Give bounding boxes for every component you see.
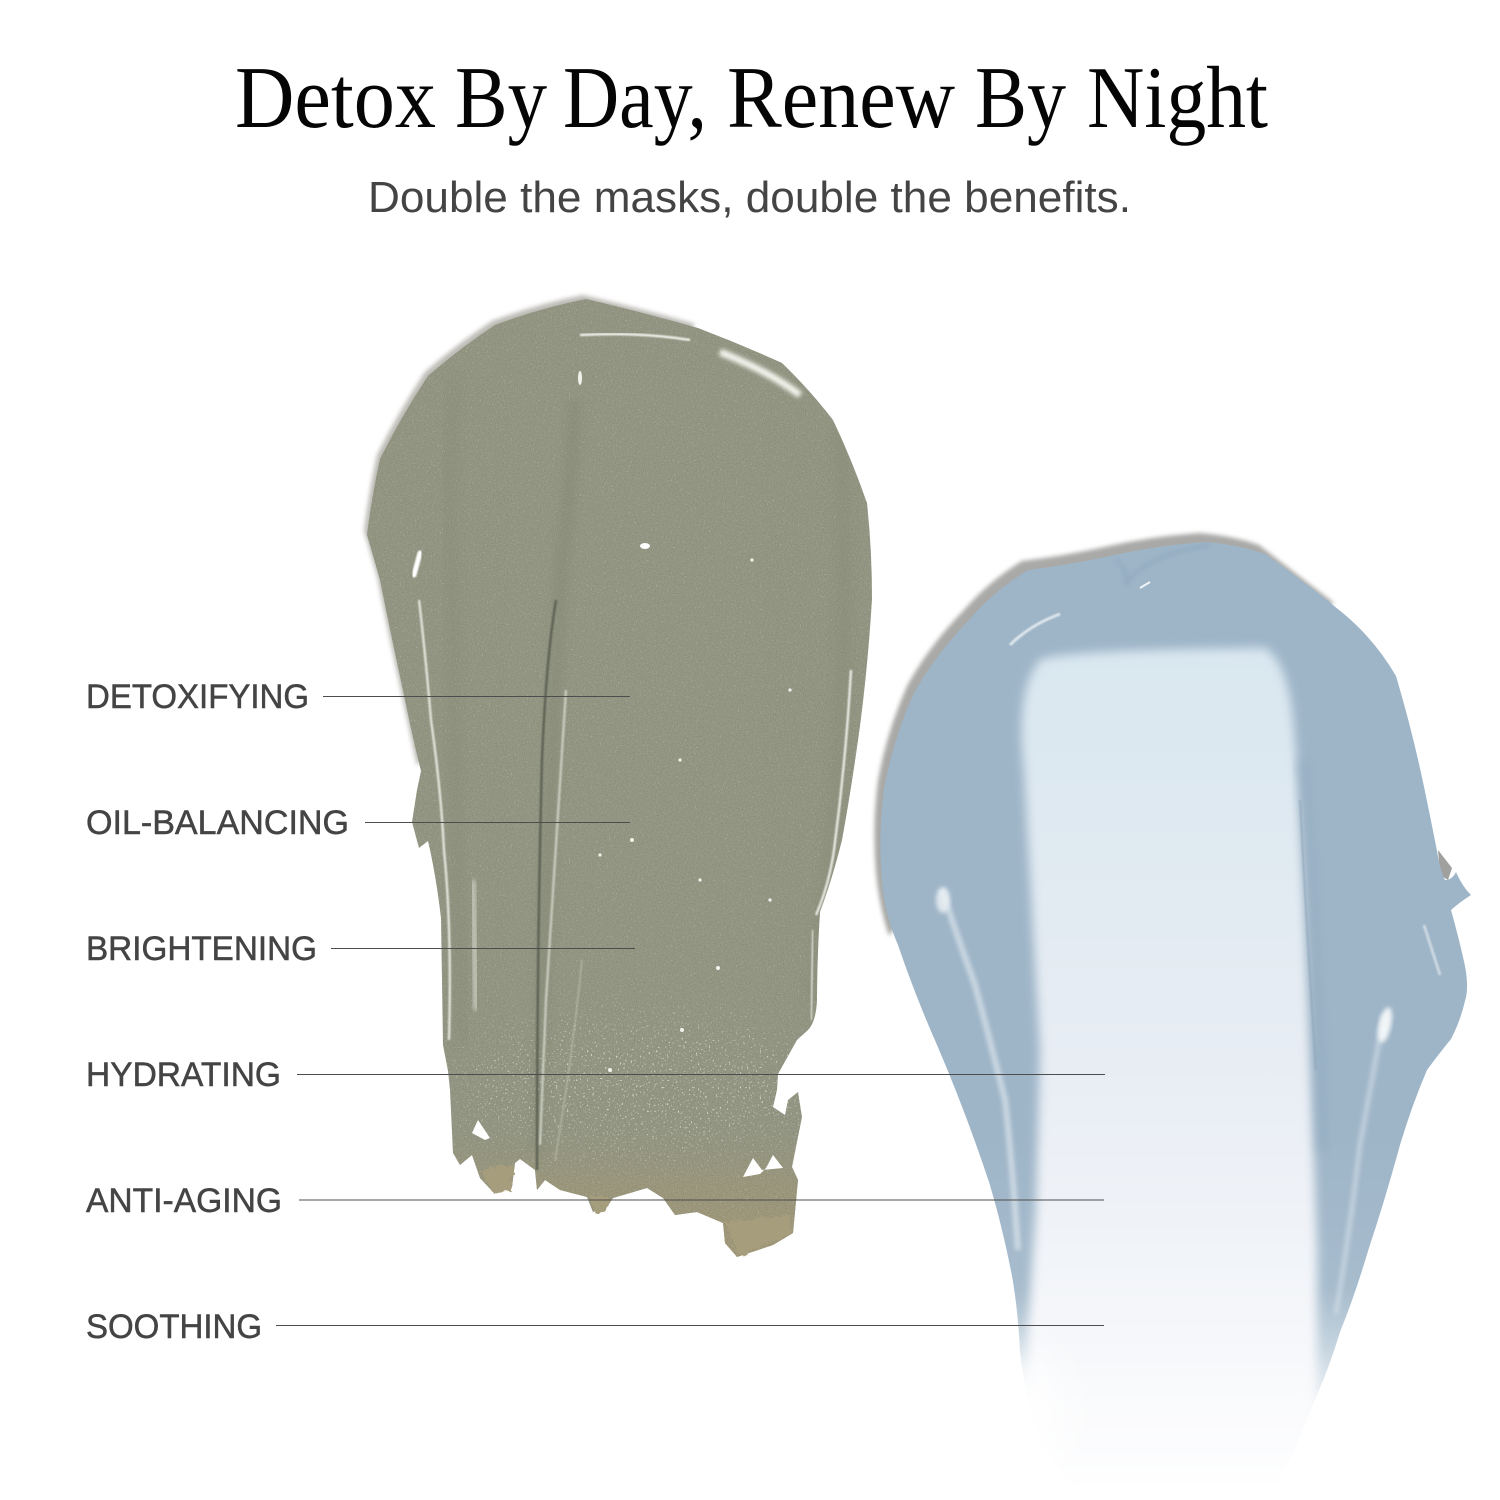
right gloss [1336,1014,1384,1314]
swatch shadow [874,533,1334,936]
title [235,50,1268,147]
title: Day, [563,50,707,147]
bottom left fade [1019,1332,1034,1406]
torn bottom crumbs [480,1165,790,1256]
swatch body [880,542,1471,1500]
specks [598,558,792,1072]
subtitle: Double the masks, double the benefits. [368,173,1131,222]
swatch body [367,299,872,1257]
callout: SOOTHING: SOOTHING [86,1308,262,1346]
white gaps [472,1120,490,1140]
right inner fold [1300,800,1316,1070]
tan dry edge [453,1150,798,1257]
left gloss streaks [419,600,450,1040]
title: By [975,50,1066,147]
swatch shadow [364,295,695,766]
callout: ANTI-AGING: ANTI-AGING [86,1182,282,1220]
green clay mask swatch [360,290,880,1270]
tab shadow [1438,850,1452,880]
title: Renew [727,50,955,147]
left gloss [942,890,1018,1250]
blue night mask swatch [874,533,1471,1500]
top gloss [580,334,690,340]
callout: OIL-BALANCING: OIL-BALANCING [86,804,349,842]
swatch texture and highlights [360,290,880,1270]
sparkle band [360,290,880,1270]
callout: BRIGHTENING: BRIGHTENING [86,930,317,968]
callout: DETOXIFYING: DETOXIFYING [86,678,309,716]
grain [360,290,880,1270]
callout: HYDRATING: HYDRATING [86,1056,281,1094]
top gloss [1010,614,1060,645]
title: Detox [235,50,436,147]
title: By [455,50,547,147]
white cream centre [1022,648,1317,1500]
folds [449,380,462,1040]
title: Night [1087,50,1268,147]
right gloss streaks [816,670,851,915]
crease [537,600,556,1170]
